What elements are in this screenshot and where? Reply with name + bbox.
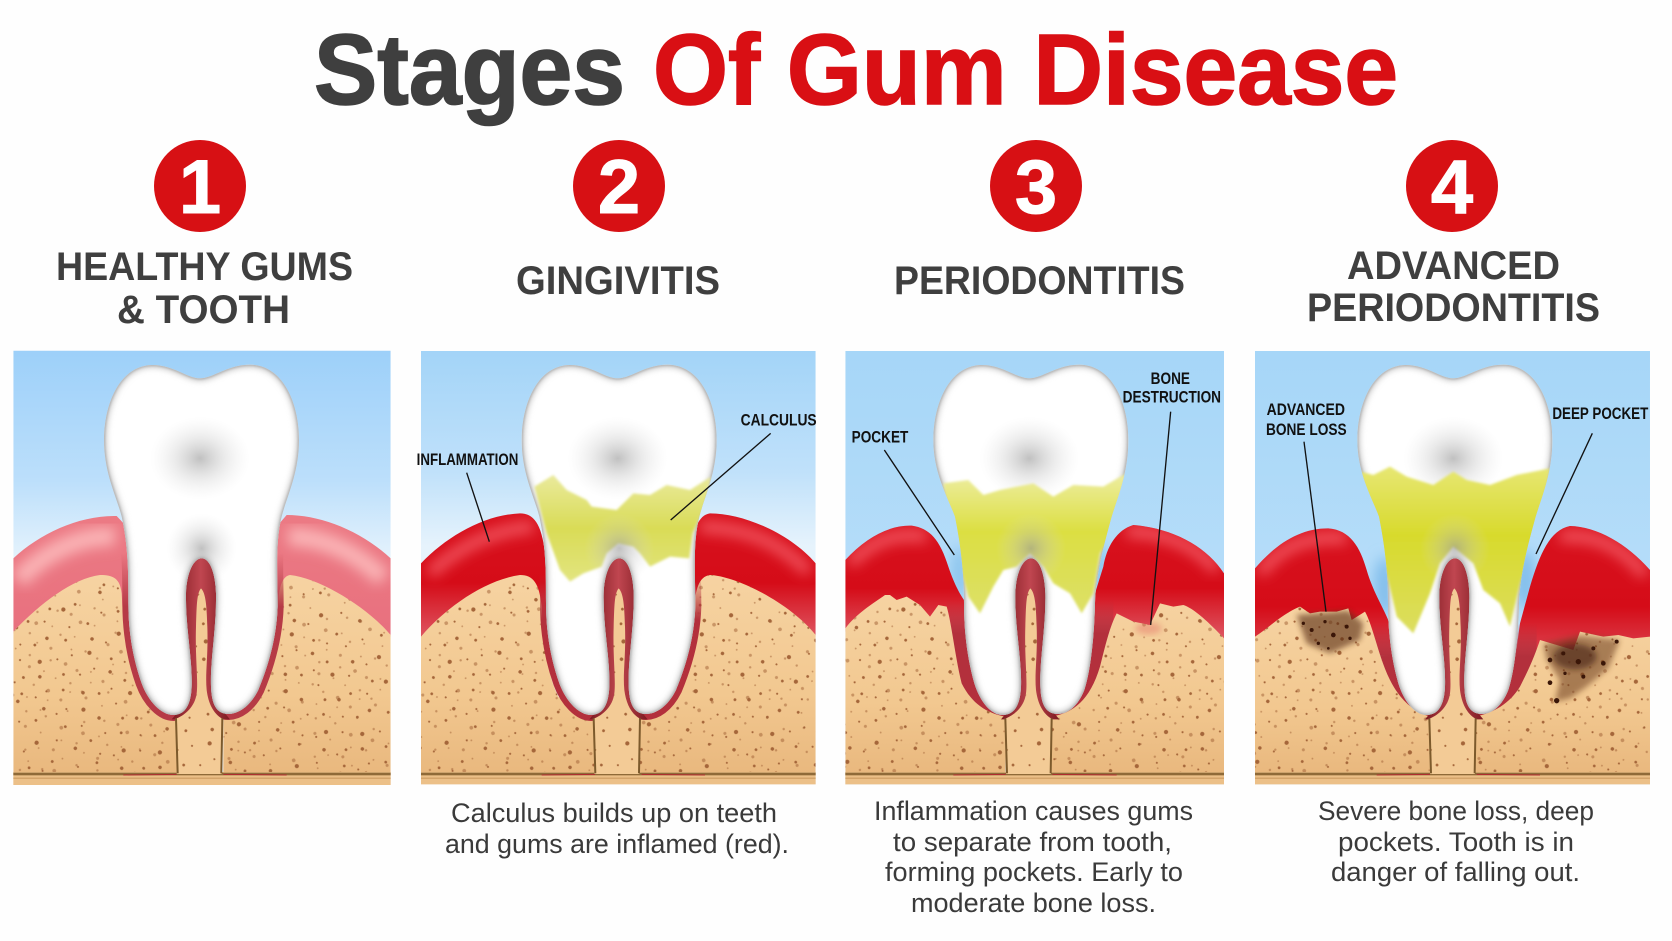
stage 4 heading: PERIODONTITIS (1307, 286, 1600, 330)
panel: periodontitis illustration (845, 351, 1224, 784)
root septum (172, 556, 230, 774)
stage 4 description: pockets. Tooth is in (1338, 827, 1574, 857)
decay patch right (1543, 635, 1620, 703)
stage 4 number badge (1406, 140, 1498, 232)
stage 2 heading: GINGIVITIS (516, 259, 720, 303)
panel: gingivitis illustration (410, 351, 843, 785)
label: advanced bone loss (1266, 400, 1347, 612)
stage 1 heading (56, 245, 353, 332)
stage 2 description: and gums are inflamed (red). (445, 829, 789, 859)
base band (13, 772, 391, 785)
tooth fork shading (176, 523, 228, 567)
title: Stages (314, 14, 625, 126)
stage 3 heading: PERIODONTITIS (894, 259, 1185, 303)
eroded speckled bone (845, 595, 1224, 773)
stage 2 number badge (573, 140, 665, 232)
tooth with root and calculus (522, 365, 717, 774)
stage 3 description: forming pockets. Early to (885, 857, 1183, 887)
tooth with root and calculus (933, 365, 1128, 774)
label: pocket: POCKET (852, 427, 908, 446)
base band (845, 772, 1224, 784)
label: deep pocket (1536, 404, 1648, 554)
gum tissue along roots (947, 600, 1113, 720)
label: calculus (671, 410, 817, 520)
tooth (104, 365, 299, 715)
speckled bone (421, 575, 816, 773)
stage 1 number badge (154, 140, 246, 232)
label: bone destruction: DESTRUCTION (1123, 388, 1221, 407)
healthy pink gums (13, 515, 391, 640)
label: inflammation (417, 450, 518, 542)
stage 3 description: Inflammation causes gums (874, 796, 1193, 826)
stage 1 heading: HEALTHY GUMS (56, 245, 353, 289)
gum lining around roots (122, 560, 284, 721)
stage 1 number badge: 1 (179, 145, 221, 230)
label: bone destruction: BONE (1151, 369, 1190, 388)
label: deep pocket: DEEP POCKET (1552, 404, 1648, 423)
pocket shadows (1373, 550, 1537, 617)
gum tissue along roots (1373, 623, 1537, 720)
yellow calculus (534, 475, 711, 582)
stage 3 number badge: 3 (1015, 145, 1057, 230)
stage 3 description (874, 796, 1193, 918)
stage 3 description: moderate bone loss. (911, 888, 1156, 918)
panel: advanced periodontitis illustration (1250, 351, 1672, 785)
label: advanced bone loss: BONE LOSS (1266, 420, 1347, 439)
label: inflammation: INFLAMMATION (417, 450, 518, 469)
stage 2 number badge: 2 (598, 145, 640, 230)
sky background (13, 351, 391, 785)
panel: healthy tooth illustration (13, 350, 391, 785)
stage 1 heading: & TOOTH (117, 288, 290, 332)
stage 2 description (445, 798, 789, 859)
stage 4 description: Severe bone loss, deep (1318, 796, 1594, 826)
base band (1255, 772, 1650, 784)
label: calculus: CALCULUS (741, 410, 817, 429)
sky background (1255, 351, 1650, 784)
yellow calculus (942, 473, 1126, 613)
pocket shadows (950, 543, 1108, 600)
stage 4 heading: ADVANCED (1347, 244, 1560, 288)
stage 3 description: to separate from tooth, (893, 827, 1172, 857)
speckled bone (13, 575, 391, 773)
inflamed red gums (421, 513, 816, 640)
severely receded gums (1255, 526, 1650, 655)
decay patch left (1297, 611, 1363, 653)
label: advanced bone loss: ADVANCED (1267, 400, 1345, 419)
sky background (421, 351, 816, 698)
receded red gums (845, 525, 1224, 640)
bone with decay (1255, 607, 1650, 773)
base band (421, 772, 816, 784)
label: bone destruction (1123, 369, 1221, 625)
stage 4 number badge: 4 (1431, 145, 1473, 230)
tooth with root and calculus (1357, 365, 1552, 774)
stage 4 description: danger of falling out. (1331, 857, 1580, 887)
sky background (845, 351, 1224, 784)
stage 4 heading (1307, 244, 1600, 330)
yellow calculus (1361, 467, 1550, 633)
title: Of Gum Disease (653, 14, 1398, 126)
stage 4 description (1318, 796, 1594, 887)
bone destruction redness (1135, 622, 1162, 634)
label: pocket (852, 427, 954, 555)
stage 2 description: Calculus builds up on teeth (451, 798, 777, 828)
stage 3 number badge (990, 140, 1082, 232)
